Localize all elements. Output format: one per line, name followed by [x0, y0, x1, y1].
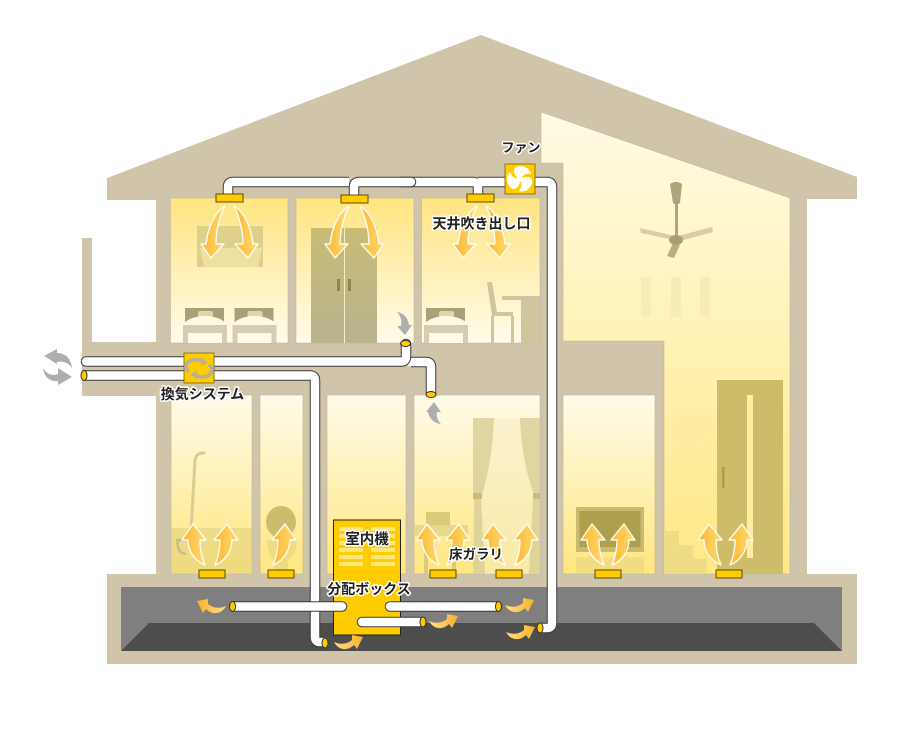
door — [717, 380, 783, 574]
label: distribution box: 分配ボックス — [327, 581, 411, 597]
air arrows falling from ceiling outlets — [201, 206, 510, 258]
toilet — [266, 506, 297, 574]
air arrows rising from floor grilles — [182, 524, 753, 565]
wall picture — [197, 226, 263, 267]
panel: bathroom — [171, 395, 252, 574]
shower and tub — [171, 453, 252, 574]
ventilation ducts — [86, 340, 436, 398]
wardrobe — [311, 228, 377, 343]
outside exhaust arrow — [44, 349, 72, 368]
panel: upstairs bedroom 1 — [170, 198, 288, 343]
room return arrow upper — [397, 312, 412, 335]
outside intake arrow — [43, 368, 72, 385]
label: ventilation system: 換気システム — [161, 386, 244, 402]
crawl space — [121, 587, 842, 651]
panel: dining room — [414, 395, 540, 574]
panel: TV room — [563, 395, 655, 574]
room return arrow lower — [426, 402, 441, 424]
icon: ventilation system box — [184, 353, 214, 383]
panel: double height living room — [541, 112, 790, 574]
high windows — [641, 277, 710, 317]
floor grilles — [199, 570, 742, 578]
ceiling fan — [640, 182, 713, 258]
house silhouette — [82, 35, 857, 664]
panel: upstairs room 3 with desk — [422, 198, 540, 343]
air arrows in crawl space — [197, 598, 535, 649]
panel: upstairs room 2 with wardrobe — [296, 198, 414, 343]
label: indoor unit: 室内機 — [345, 531, 389, 548]
chair and desk — [487, 282, 540, 343]
dining table — [414, 512, 468, 574]
panel: utility room — [327, 395, 406, 574]
supply duct: fan to ceiling outlets and down to crawl space — [228, 182, 552, 633]
label: fan: ファン — [501, 140, 541, 155]
beds — [183, 308, 276, 343]
crawl space ducts — [230, 602, 502, 627]
indoor unit and distribution box — [334, 520, 400, 635]
curtains — [473, 418, 540, 574]
label: floor grille: 床ガラリ — [449, 547, 503, 562]
television — [576, 507, 644, 574]
panel: toilet — [260, 395, 303, 574]
icon: fan box — [503, 164, 535, 195]
return duct to distribution box — [81, 370, 328, 648]
bed — [424, 308, 468, 343]
gray intake and exhaust arrows — [43, 312, 441, 424]
ceiling outlets — [216, 194, 494, 203]
label: ceiling outlet: 天井吹き出し口 — [432, 216, 530, 232]
stairs — [664, 531, 707, 574]
